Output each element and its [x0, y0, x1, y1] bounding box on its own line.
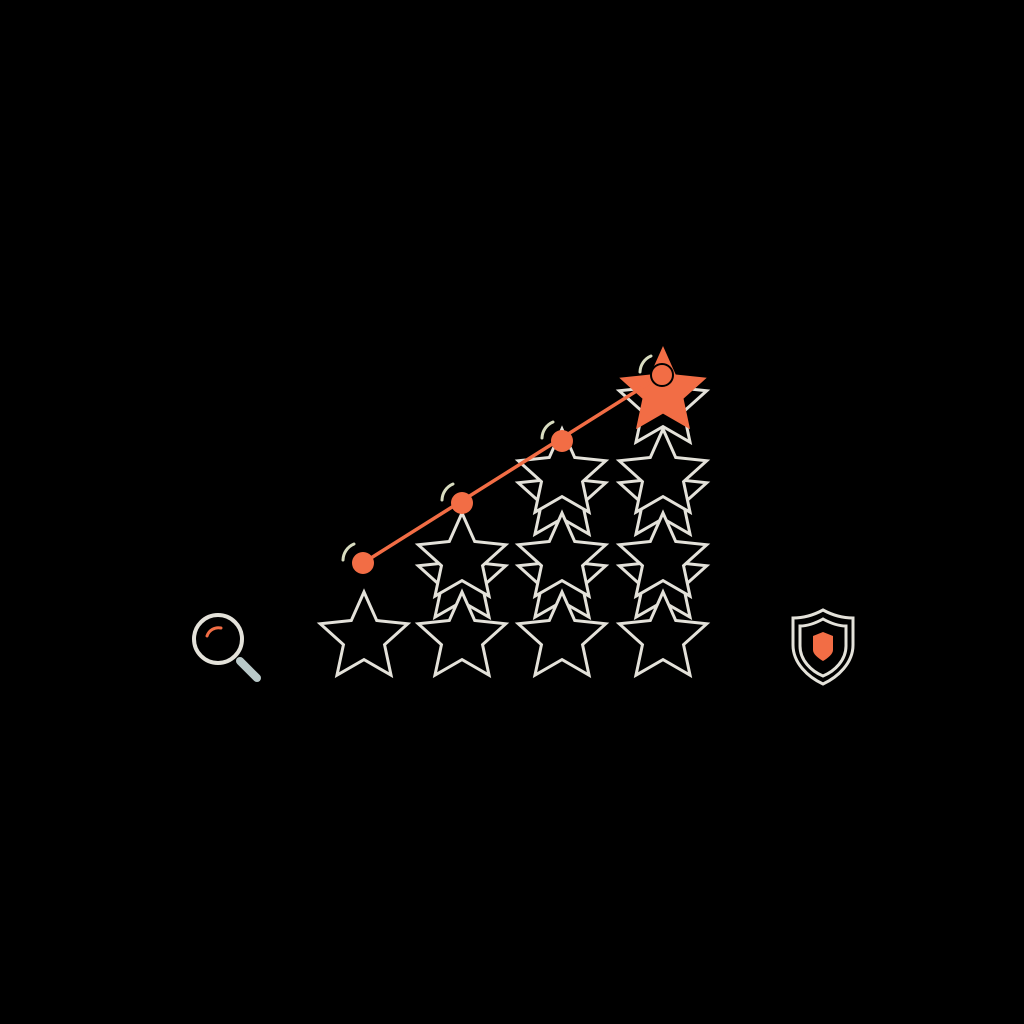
column 3: [518, 429, 606, 675]
column 1: [320, 592, 408, 675]
column 4: [619, 359, 707, 675]
icon: magnifying glass: [194, 615, 257, 678]
column 2: [418, 513, 506, 675]
icon: shield: [793, 610, 853, 684]
icon: highlighted orange star: [619, 346, 707, 429]
trend line with dots: [343, 356, 673, 574]
star columns: [320, 359, 707, 675]
